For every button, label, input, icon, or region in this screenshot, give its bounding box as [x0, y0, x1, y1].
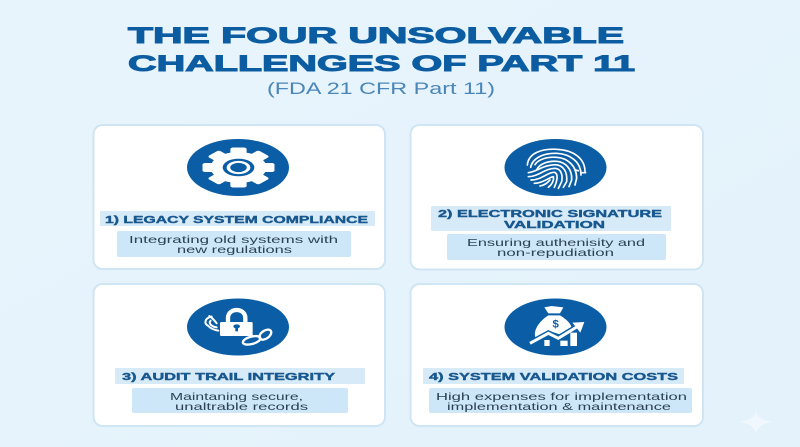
icon: gear: [187, 139, 289, 196]
icon: money bag with rising arrow: $: [553, 319, 560, 331]
panel: legacy system compliance: [94, 125, 385, 269]
heading: legacy system compliance: 1) LEGACY SYSTEM COMPLIANCE: [105, 214, 368, 226]
heading: audit trail integrity: [115, 368, 365, 384]
heading: audit trail integrity: 3) AUDIT TRAIL INTEGRITY: [122, 371, 335, 383]
subtitle: (FDA 21 CFR Part 11): [267, 79, 495, 98]
description: signatures: [447, 234, 666, 260]
description: audit records: Maintaning secure,: [170, 391, 303, 403]
description: signatures: Ensuring authenisity and: [467, 237, 645, 249]
description: costs: [429, 388, 692, 413]
description: audit records: [132, 388, 348, 413]
description: signatures: non-repudiation: [497, 247, 614, 259]
description: legacy systems: new regulations: [177, 244, 292, 256]
icon: fingerprint: [504, 139, 606, 196]
heading: electronic signature validation: 2) ELECTRONIC SIGNATURE: [438, 208, 662, 220]
heading: system validation costs: 4) SYSTEM VALIDATION COSTS: [429, 371, 678, 383]
heading: legacy system compliance: [100, 211, 375, 226]
panel: electronic signature validation: [410, 125, 703, 270]
icon: sparkle: [740, 411, 772, 433]
description: audit records: unaltrable records: [175, 401, 308, 413]
description: costs: implementation & maintenance: [447, 401, 671, 413]
title: THE FOUR UNSOLVABLE: [128, 23, 624, 48]
description: legacy systems: Integrating old systems with: [129, 234, 338, 246]
heading: system validation costs: [423, 368, 684, 384]
icon: money bag with rising arrow: [504, 298, 606, 356]
title: [128, 23, 635, 76]
panel: audit trail integrity: [94, 284, 385, 426]
panel: system validation costs: [410, 284, 703, 426]
description: legacy systems: [117, 231, 351, 257]
heading: electronic signature validation: VALIDATION: [504, 219, 605, 231]
heading: electronic signature validation: [431, 206, 671, 231]
icon: padlock and chain: [187, 298, 289, 356]
title: CHALLENGES OF PART 11: [128, 51, 635, 76]
description: costs: High expenses for implementation: [436, 391, 687, 403]
